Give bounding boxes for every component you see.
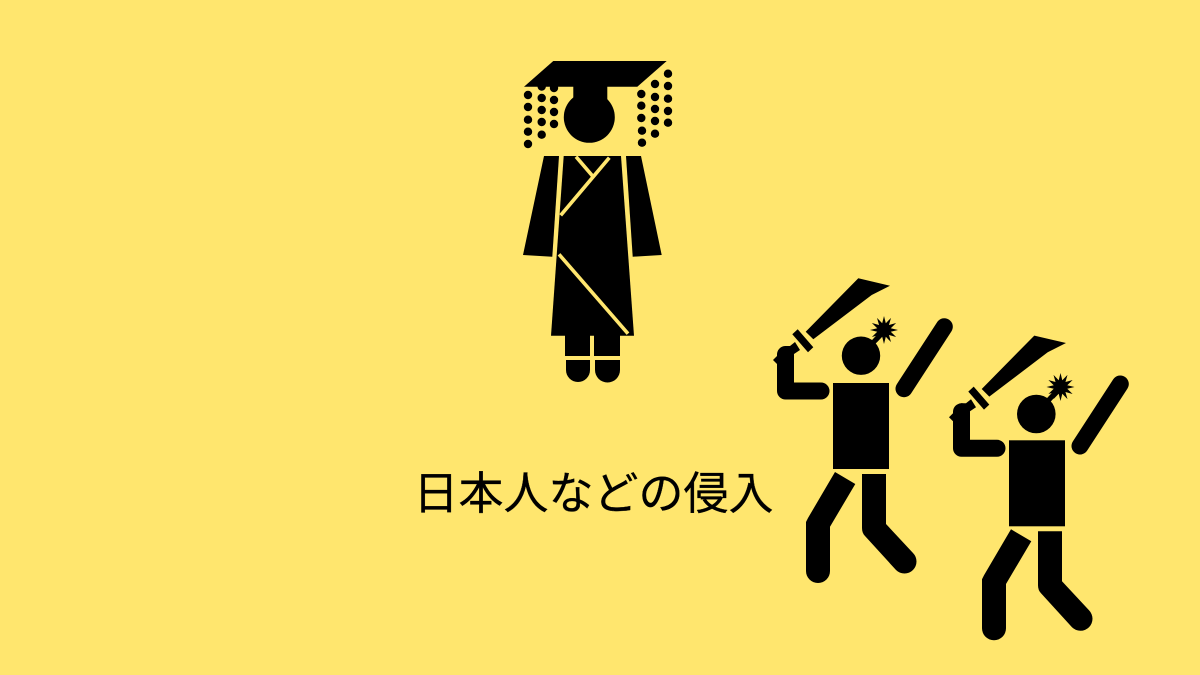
legs and feet: [565, 335, 620, 382]
crown board: [524, 61, 667, 87]
figure: first attacker with sword: [773, 278, 944, 583]
head and neck: [564, 85, 615, 143]
figure: court official with crown and robe: [523, 61, 672, 382]
crown bead strings: [524, 70, 672, 148]
sleeves: [523, 156, 662, 257]
robe: [551, 156, 634, 336]
caption: 日本人などの侵入: [413, 468, 774, 518]
figure: second attacker with sword: [949, 336, 1120, 640]
